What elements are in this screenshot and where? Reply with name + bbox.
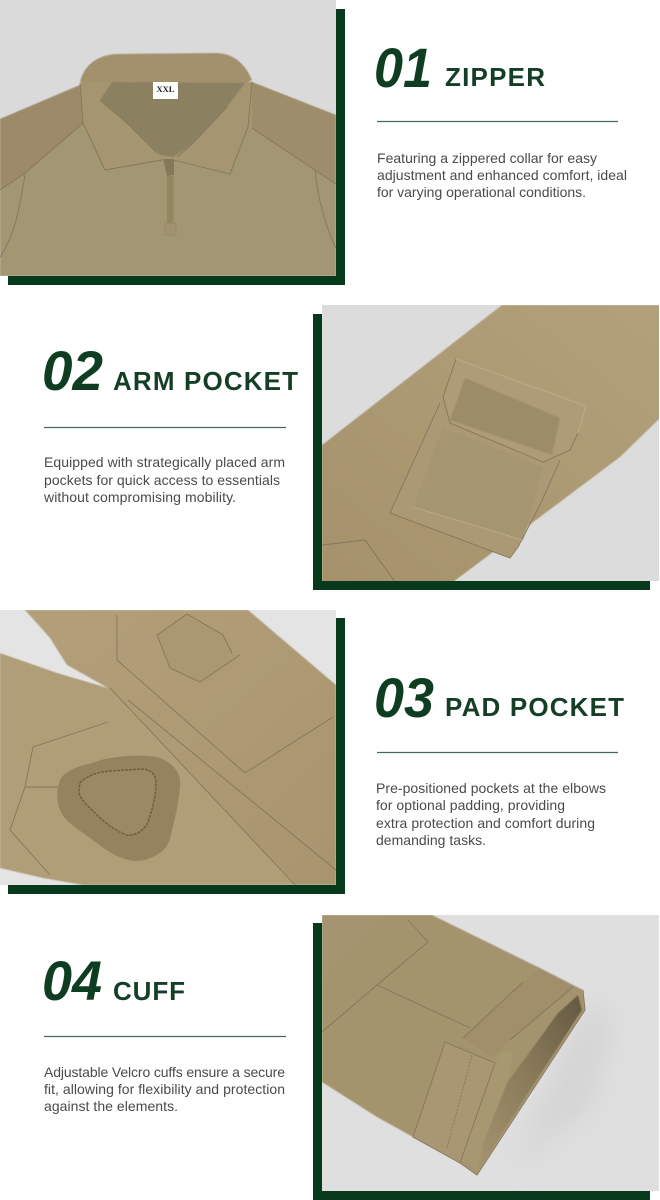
- description: pad pocket: demanding tasks.: [376, 832, 486, 848]
- green frame: cuff photo: [313, 923, 650, 1200]
- description: arm pocket: Equipped with strategically placed arm: [44, 454, 285, 470]
- panel: arm pocket text: [42, 339, 298, 505]
- green frame: zipper photo: [8, 9, 345, 285]
- panel: cuff text: [42, 949, 289, 1114]
- description: zipper: adjustment and enhanced comfort, ideal: [377, 167, 627, 183]
- number 01: 01: [374, 36, 432, 99]
- panel: zipper text: [374, 36, 631, 200]
- number 03: 03: [374, 666, 434, 729]
- size label: XXL tag: [153, 82, 178, 99]
- panel: cuff: [313, 915, 660, 1200]
- green frame: pad pocket photo: [8, 618, 345, 894]
- icon: zipper pull and placket: [163, 159, 176, 235]
- green frame: arm pocket photo: [313, 314, 650, 590]
- panel: pad pocket text: [374, 666, 624, 848]
- panel: pad pocket: [0, 610, 345, 894]
- photo: shirt collar and zipper: [0, 0, 336, 276]
- description: zipper: for varying operational conditions.: [377, 184, 586, 200]
- heading: pad pocket: PAD POCKET: [445, 692, 624, 722]
- description: arm pocket: pockets for quick access to essentials: [44, 472, 280, 488]
- heading: cuff: CUFF: [113, 976, 185, 1006]
- size label: XXL tag: XXL: [157, 84, 175, 94]
- description: pad pocket: Pre-positioned pockets at the elbows: [376, 780, 606, 796]
- number 02: 02: [42, 339, 103, 402]
- description: arm pocket: without compromising mobility.: [43, 489, 236, 505]
- description: pad pocket: for optional padding, providing: [376, 797, 565, 813]
- photo: sleeve cuff with velcro: [322, 915, 660, 1191]
- panel: zipper: [0, 0, 345, 285]
- icon: elbow pad: [57, 756, 180, 861]
- number 04: 04: [42, 949, 102, 1012]
- photo: elbow pad pockets: [0, 610, 336, 885]
- description: pad pocket: extra protection and comfort during: [376, 815, 595, 831]
- heading: zipper: ZIPPER: [445, 62, 545, 92]
- photo: sleeve with velcro pocket: [322, 305, 660, 582]
- panel: arm pocket: [313, 305, 660, 590]
- description: cuff: fit, allowing for flexibility and protection: [44, 1081, 285, 1097]
- description: cuff: Adjustable Velcro cuffs ensure a secure: [44, 1064, 285, 1080]
- description: cuff: against the elements.: [44, 1098, 178, 1114]
- description: zipper: Featuring a zippered collar for easy: [377, 150, 597, 166]
- heading: arm pocket: ARM POCKET: [113, 366, 298, 396]
